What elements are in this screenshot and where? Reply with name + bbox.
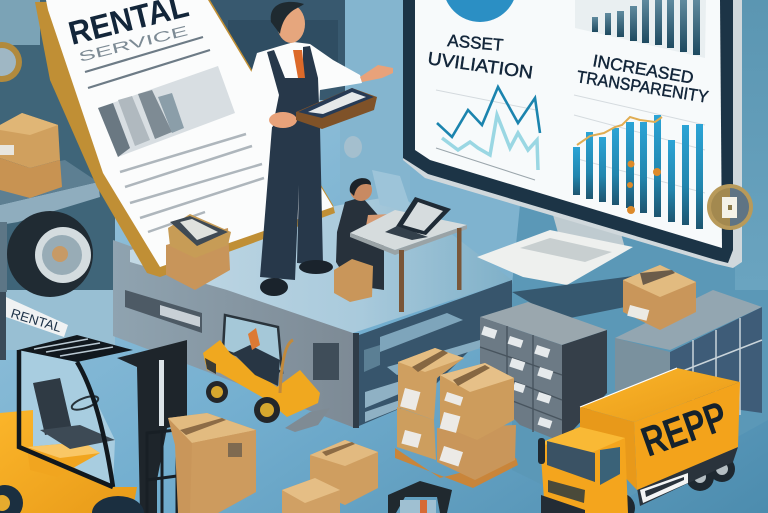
filing cabinet, blue <box>615 290 762 415</box>
fork cage <box>147 430 177 513</box>
line chart <box>436 87 540 180</box>
head <box>277 5 305 43</box>
large yellow forklift <box>0 297 256 513</box>
filing cabinet, grey <box>480 275 660 442</box>
box on cabinet <box>623 265 696 330</box>
box labels <box>400 388 463 466</box>
wall vent <box>125 290 202 333</box>
hand, right <box>360 65 393 82</box>
seated worker at desk <box>334 170 467 312</box>
small forklift at bottom <box>388 481 452 513</box>
seat and driver <box>233 345 280 386</box>
small yellow forklift <box>203 315 330 432</box>
heading: INCREASED TRANSPARENCY <box>575 51 710 107</box>
truck logo text: REPP <box>635 392 733 465</box>
truck chassis <box>637 447 738 506</box>
forks / debris <box>285 408 330 432</box>
cardboard boxes on shelf <box>0 113 62 198</box>
delivery truck <box>538 368 740 513</box>
lower boxes <box>397 407 436 460</box>
desk <box>350 210 467 312</box>
wheels <box>0 485 23 513</box>
legs <box>260 127 323 280</box>
monitor frame <box>403 0 742 268</box>
stairs <box>359 280 512 426</box>
white shirt <box>243 42 362 125</box>
seat <box>33 378 115 449</box>
wheels <box>206 381 228 403</box>
raised platform <box>113 195 512 428</box>
mast <box>280 340 293 393</box>
top bar chart <box>575 0 706 58</box>
metal shelf <box>0 182 100 225</box>
transparency bar chart <box>573 95 705 229</box>
box by desk <box>334 259 373 302</box>
tyre <box>7 211 93 297</box>
overalls bib <box>267 46 320 130</box>
tie <box>293 50 305 78</box>
rental document <box>35 0 335 277</box>
worker arm <box>366 214 392 226</box>
cage <box>223 315 282 372</box>
worker head <box>350 179 372 201</box>
document photo block <box>98 66 235 157</box>
body <box>0 410 137 513</box>
small box and printer by document <box>166 214 231 290</box>
hand, holding <box>269 112 297 128</box>
document text lines <box>85 37 210 88</box>
mast <box>117 340 187 513</box>
truck cab <box>538 427 628 513</box>
screen <box>415 0 722 248</box>
wall icon <box>344 136 362 158</box>
heading: ASSET UTILIZATION: ASSET <box>447 31 504 55</box>
truck wheels <box>605 456 735 513</box>
rental banner <box>6 297 68 337</box>
heading: ASSET UTILIZATION <box>426 31 534 83</box>
pallet <box>395 448 518 488</box>
carried box <box>168 413 256 513</box>
standing man with tablet <box>243 2 393 296</box>
heading: INCREASED TRANSPARENCY: TRANSPARENITY <box>575 67 710 107</box>
heading: ASSET UTILIZATION: UVILIATION <box>426 48 534 83</box>
document body lines <box>120 134 264 232</box>
laptop <box>372 170 451 240</box>
stacked boxes on pallet <box>395 348 518 488</box>
wall panel <box>313 343 339 380</box>
cab interior <box>18 350 115 487</box>
body <box>203 340 320 417</box>
worker body <box>336 197 384 290</box>
heading: INCREASED TRANSPARENCY: INCREASED <box>591 51 695 88</box>
overhead guard <box>18 335 133 487</box>
tablet <box>296 88 377 129</box>
steering wheel <box>70 394 100 412</box>
monitor with dashboards <box>403 0 742 285</box>
gold badge icon on monitor <box>707 184 753 230</box>
rental banner: RENTAL <box>9 306 63 335</box>
floor boxes <box>282 440 378 513</box>
upper boxes <box>398 348 464 420</box>
gauge badge <box>0 42 22 82</box>
monitor stand <box>477 215 633 285</box>
cargo box <box>580 368 740 422</box>
subheading: SERVICE: SERVICE <box>77 22 189 65</box>
left shelving with boxes and tyre <box>0 42 100 297</box>
shoes <box>260 278 288 296</box>
pie chart <box>443 0 517 22</box>
